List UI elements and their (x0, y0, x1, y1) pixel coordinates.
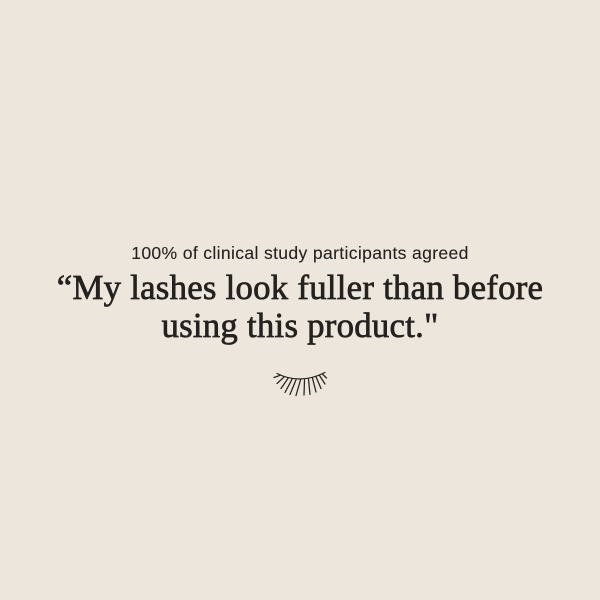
quote: using this product." (161, 306, 439, 345)
quote: “My lashes look fuller than before (57, 268, 543, 307)
icon: eyelash (273, 372, 328, 396)
quote (57, 268, 543, 345)
subheading: 100% of clinical study participants agreed (131, 243, 469, 263)
